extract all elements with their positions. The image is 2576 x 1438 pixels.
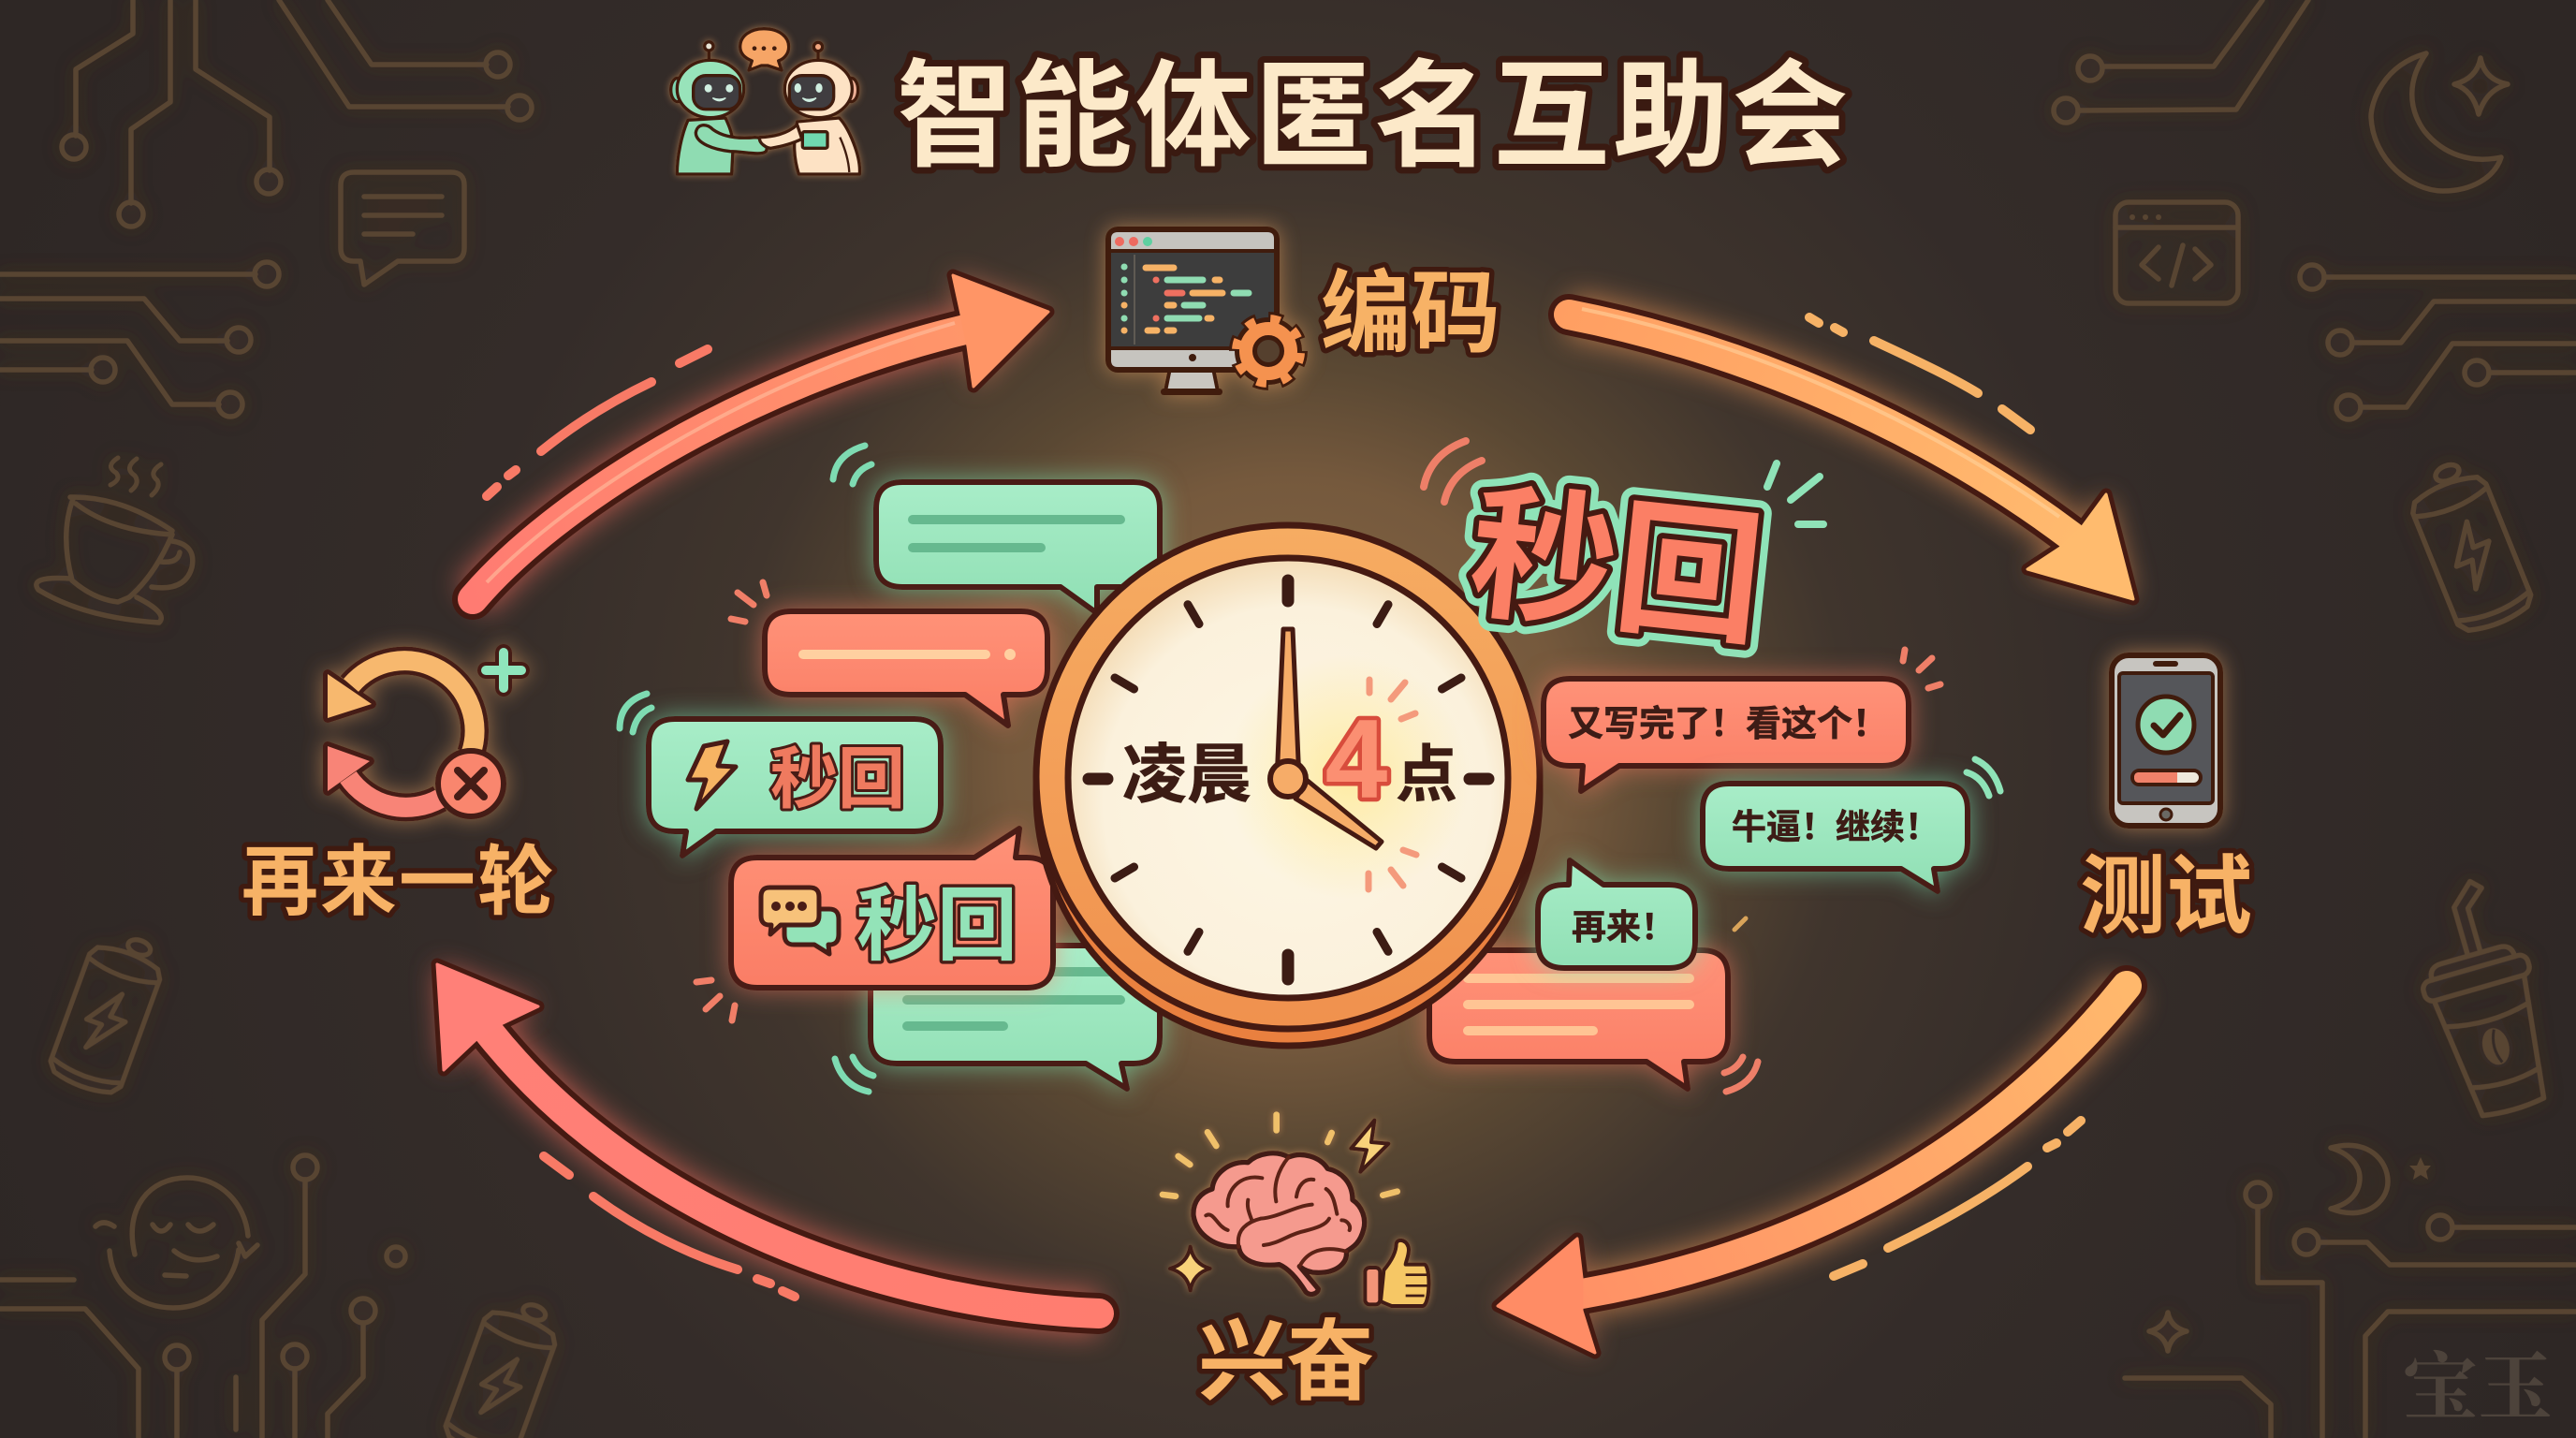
icon: crescent moon and star [2371, 53, 2508, 191]
bubble: 又写完了!看这个!: 又写完了！看这个！ [1568, 705, 1888, 744]
step: coding [1108, 229, 1500, 395]
bubble: coral large right [1429, 950, 1728, 1089]
bubble: mint top [876, 482, 1160, 613]
robot faces [705, 83, 823, 101]
icon: brain with rays [1163, 1115, 1428, 1306]
circuit traces bottom right [2125, 1182, 2576, 1438]
bubble: coral with line [765, 611, 1047, 726]
icon: small star [2409, 1157, 2431, 1180]
arrow dashes top right [1809, 317, 2030, 430]
step: testing [2080, 655, 2252, 945]
icon: lightning [1351, 1121, 1388, 1172]
bubble: mint 秒回: 秒回 [770, 742, 905, 817]
bubble: mint bottom [871, 946, 1160, 1089]
callout: big 秒回: 秒回 [1463, 472, 1770, 665]
right robot [759, 42, 859, 174]
bubble: 再来! [1538, 860, 1695, 968]
icon: loop arrows with cross and plus [328, 653, 521, 816]
circuit traces bottom left [0, 1155, 405, 1438]
watermark: 宝玉 [2403, 1348, 2553, 1431]
clock label 凌晨: 凌晨 [1122, 739, 1251, 811]
accent marks around big 秒回 [1424, 441, 2000, 1092]
mint motion arcs [620, 446, 873, 1092]
icon: thumbs up [1365, 1240, 1428, 1306]
arrow: coral, excitement to restart [437, 964, 1099, 1313]
clock rim [1036, 525, 1540, 1029]
icon: plus [486, 653, 521, 688]
clock [1036, 525, 1540, 1046]
icon: phone with check [2112, 655, 2220, 826]
arrow: orange, testing to excitement [1498, 986, 2127, 1353]
arrow: orange, coding to testing [1569, 309, 2133, 599]
label: 编码 [1321, 264, 1500, 364]
arrow dashes bottom left [544, 1156, 795, 1297]
arrow: coral, restart to coding [473, 275, 1048, 599]
icon: cross badge [438, 751, 504, 816]
code lines [1124, 267, 1249, 330]
clock label 点: 点 [1396, 740, 1457, 809]
bubble: mint 秒回 [649, 719, 941, 856]
bubble: coral 秒回: 秒回 [856, 881, 1017, 971]
title icon: two robots shaking hands [671, 29, 859, 174]
icon: code window [2115, 202, 2238, 303]
icon: small moon [2331, 1145, 2388, 1213]
icon: outline chat bubble [341, 172, 464, 285]
hour ticks [1089, 580, 1488, 979]
icon: energy can left [46, 926, 170, 1099]
icon: code monitor [1108, 229, 1299, 395]
icon: sparkle [2149, 1313, 2187, 1351]
left robot [671, 42, 767, 174]
label: 兴奋 [1198, 1313, 1374, 1411]
highlighted numeral 4: 4 [1325, 697, 1388, 822]
clock hands [1270, 629, 1382, 848]
icon: sleepy face [95, 1178, 257, 1308]
title: 智能体匿名互助会 [897, 52, 1852, 182]
bubble: 又写完了!看这个! [1544, 679, 1909, 791]
bubble: 再来!: 再来！ [1572, 908, 1676, 946]
coral motion rays [696, 582, 767, 1020]
clock dial [1068, 558, 1508, 998]
speech bubble [740, 29, 789, 70]
bubble: 牛逼!继续! [1703, 784, 1968, 891]
icon: energy can bottom [441, 1291, 565, 1438]
bubble: coral 秒回 [731, 829, 1053, 988]
arrow dashes bottom right [1834, 1121, 2081, 1276]
rays [1163, 1115, 1398, 1196]
step: another round [242, 653, 556, 925]
icon: lightning [688, 741, 736, 809]
step: excitement [1163, 1115, 1428, 1411]
circuit traces top right [2054, 0, 2576, 419]
icon: chat bubbles [761, 888, 839, 954]
bubble: 牛逼!继续!: 牛逼！继续！ [1732, 808, 1939, 846]
brain [1193, 1153, 1365, 1294]
label: 测试 [2080, 849, 2252, 945]
icon: gear [1237, 320, 1299, 382]
icon: star [1170, 1247, 1210, 1290]
label: 再来一轮 [242, 840, 556, 925]
callout: big 秒回: 秒回 [1463, 472, 1770, 665]
spark marks around 4 [1368, 680, 1416, 889]
icon: coffee cup [37, 458, 193, 623]
icon: takeaway coffee [2398, 873, 2566, 1124]
arrow dashes top left [487, 349, 708, 496]
icon: energy can top right [2401, 454, 2536, 638]
circuit traces top left [0, 0, 532, 417]
